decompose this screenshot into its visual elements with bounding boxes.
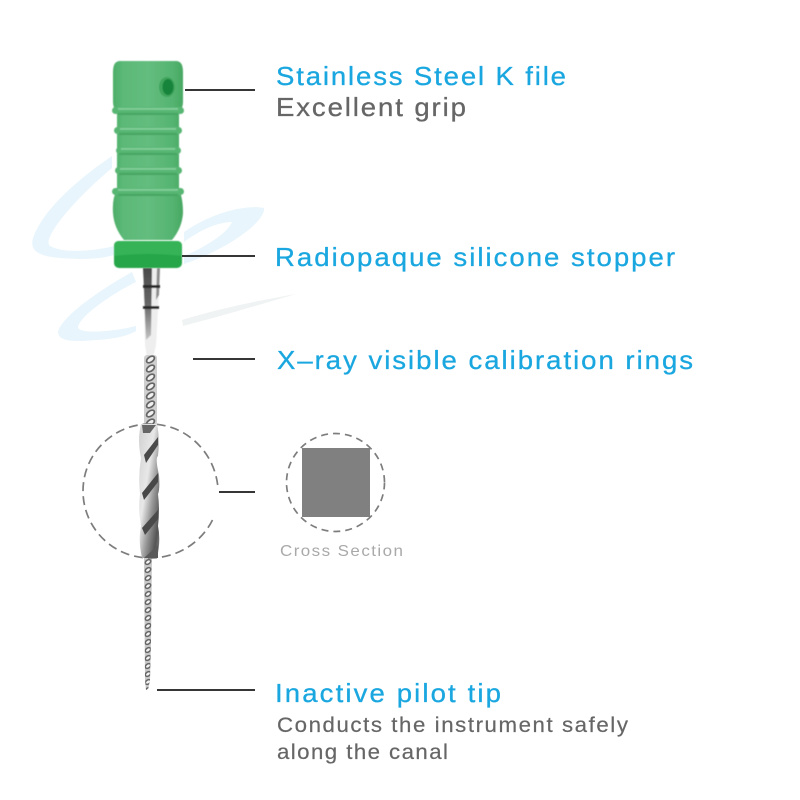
label: calibration rings: X–ray visible calibration rings	[277, 346, 693, 375]
file shank	[143, 268, 160, 358]
label: inactive pilot tip: along the canal	[277, 740, 448, 764]
label: silicone stopper: Radiopaque silicone stopper	[275, 243, 675, 272]
cross section diagram	[280, 434, 403, 560]
leader lines	[157, 90, 255, 690]
dashed magnifier circle	[83, 424, 218, 558]
magnified twisted section	[139, 424, 159, 558]
silicone stopper	[114, 241, 182, 268]
cross section caption: Cross Section	[280, 542, 403, 560]
label: Stainless Steel K file: Excellent grip	[276, 93, 466, 122]
label: inactive pilot tip: Conducts the instrument safely	[277, 713, 628, 737]
dashed section circle	[286, 434, 384, 532]
handle hole	[159, 77, 175, 97]
label: Stainless Steel K file	[276, 62, 566, 122]
label: inactive pilot tip	[275, 679, 628, 764]
upper twisted shaft	[144, 355, 157, 425]
lower twisted shaft	[144, 558, 152, 690]
section square	[302, 448, 370, 517]
green handle	[112, 61, 184, 240]
handle ridges	[112, 107, 184, 195]
label: Stainless Steel K file: Stainless Steel K file	[276, 62, 566, 91]
icon: K file instrument	[83, 61, 218, 690]
label: inactive pilot tip: Inactive pilot tip	[275, 679, 501, 708]
background swoosh decoration	[32, 156, 296, 341]
